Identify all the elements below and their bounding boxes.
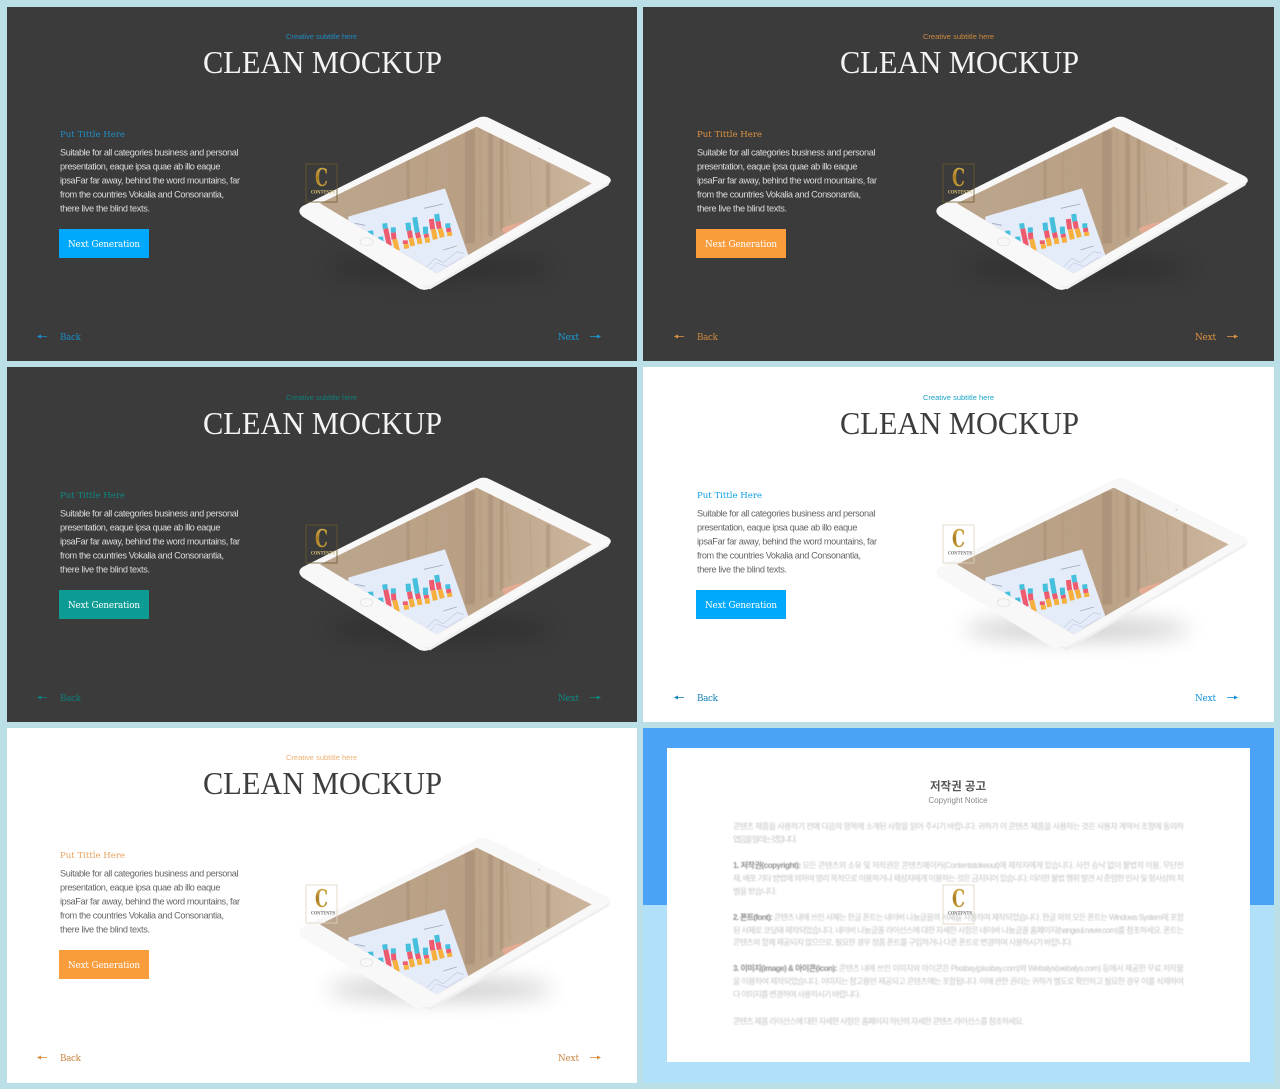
body text: Suitable for all categories business and personal — [697, 148, 876, 158]
body text: from the countries Vokalia and Consonantia, — [697, 190, 861, 200]
body text: ipsaFar far away, behind the word mountains, far — [60, 176, 240, 186]
notice body text: 다 이미지를 변경하여 사용하시기 바랍니다. — [733, 989, 861, 999]
icon: logo watermark: CONTENTS — [311, 910, 335, 916]
icon: logo watermark — [943, 884, 974, 924]
panel: copyright notice — [643, 728, 1274, 1083]
next link: Next — [558, 1054, 579, 1064]
back link: Back — [697, 333, 719, 343]
panel: dark slide, teal accent — [7, 367, 637, 722]
body text: presentation, eaque ipsa quae ab illo eaque — [60, 882, 220, 892]
body text: there live the blind texts. — [60, 564, 150, 574]
notice body text: 였음을 알리는 것입니다. — [733, 834, 797, 844]
button: Next Generation — [68, 601, 140, 611]
next link — [1195, 333, 1238, 343]
back link — [674, 333, 719, 343]
section heading: Put Tittle Here — [60, 130, 125, 140]
section heading: Put Tittle Here — [697, 491, 762, 501]
body text: there live the blind texts. — [60, 204, 150, 214]
body text: from the countries Vokalia and Consonantia, — [60, 190, 224, 200]
next link — [558, 333, 601, 343]
back link — [37, 1054, 82, 1064]
icon: logo watermark: CONTENTS — [948, 910, 972, 916]
subtitle: Creative subtitle here — [286, 753, 357, 762]
body text: Suitable for all categories business and personal — [697, 508, 876, 518]
body text: from the countries Vokalia and Consonantia, — [697, 550, 861, 560]
button: Next Generation — [705, 240, 777, 250]
back link: Back — [60, 694, 82, 704]
icon: logo watermark: CONTENTS — [311, 550, 335, 556]
body text: ipsaFar far away, behind the word mountains, far — [697, 176, 877, 186]
next link: Next — [1195, 694, 1216, 704]
notice body text: 3. 이미지(image) & 아이콘(icon): 콘텐츠 내에 쓰인 이미지와 아이콘은 Pixabay(pixabay.com)와 Webalys(webalys.com) 등에서 제공한 무료 저작물 — [733, 963, 1184, 973]
icon: logo watermark — [306, 524, 337, 563]
body text — [697, 508, 877, 574]
body text: ipsaFar far away, behind the word mountains, far — [697, 536, 877, 546]
tablet mockup — [299, 838, 611, 1011]
notice body text: 콘텐츠와 함께 제공되지 않으므로, 필요한 경우 정품 폰트를 구입하거나 다른 폰트로 변경하여 사용하시기 바랍니다. — [733, 937, 1073, 947]
title: CLEAN MOCKUP — [203, 44, 442, 80]
back link: Back — [697, 694, 719, 704]
back link — [37, 333, 82, 343]
icon: logo watermark: CONTENTS — [311, 190, 335, 196]
subtitle: Creative subtitle here — [286, 32, 357, 41]
notice body text: 된 서체로 코딩돼 제작되었습니다. 네이버 나눔글꼴 라이선스에 대한 자세한 사항은 네이버 나눔글꼴 홈페이지(hangeul.naver.com)를 참조하세요. 폰트는 — [733, 925, 1184, 935]
icon: logo watermark: C — [315, 524, 328, 553]
section heading: Put Tittle Here — [60, 851, 125, 861]
subtitle: Creative subtitle here — [923, 393, 994, 402]
icon: logo watermark: CONTENTS — [948, 190, 972, 196]
body text: presentation, eaque ipsa quae ab illo eaque — [697, 162, 857, 172]
notice body text — [733, 821, 1185, 1026]
next link: Next — [558, 333, 579, 343]
button — [59, 950, 149, 979]
tablet mockup — [936, 117, 1248, 290]
notice body text: 을 이용하여 제작되었습니다. 이미지는 참고용만 제공되고 콘텐츠에는 포함됩니다. 이에 관한 권리는 귀하가 별도로 확인하고 필요한 경우 이를 삭제하여 — [733, 976, 1184, 986]
body text: from the countries Vokalia and Consonantia, — [60, 910, 224, 920]
panel: white slide, orange accent — [7, 728, 637, 1083]
button: Next Generation — [68, 961, 140, 971]
panel: dark slide, orange accent — [643, 7, 1274, 361]
icon: logo watermark: C — [315, 163, 328, 192]
next link: Next — [1195, 333, 1216, 343]
next link: Next — [558, 694, 579, 704]
panel: white slide, blue accent — [643, 367, 1274, 722]
notice subheading: Copyright Notice — [928, 796, 988, 805]
body text — [60, 508, 240, 574]
notice body text: 재, 배포 기타 방법에 의하여 영리 목적으로 이용하거나 제삼자에게 이용하는 것은 금지되어 있습니다. 이러한 불법 행위 발견 시 준엄한 민사 및 형사상의 처 — [733, 873, 1184, 883]
icon: logo watermark — [943, 524, 974, 563]
button: Next Generation — [705, 601, 777, 611]
title: CLEAN MOCKUP — [203, 405, 442, 441]
body text: Suitable for all categories business and personal — [60, 148, 238, 158]
body text: ipsaFar far away, behind the word mountains, far — [60, 896, 240, 906]
body text: from the countries Vokalia and Consonantia, — [60, 550, 224, 560]
icon: logo watermark: C — [952, 524, 965, 553]
back link — [674, 694, 719, 704]
section heading: Put Tittle Here — [60, 491, 125, 501]
button — [696, 590, 786, 619]
notice heading: 저작권 공고 — [930, 779, 986, 793]
section heading: Put Tittle Here — [697, 130, 762, 140]
button — [59, 590, 149, 619]
notice card — [667, 748, 1250, 1062]
subtitle: Creative subtitle here — [286, 393, 357, 402]
body text — [697, 148, 877, 214]
back link: Back — [60, 333, 82, 343]
back link — [37, 694, 82, 704]
notice body text: 콘텐츠 제품 라이선스에 대한 자세한 사항은 홈페이지 하단의 자세한 콘텐츠 라이선스를 참조하세요. — [733, 1016, 1024, 1026]
body text: there live the blind texts. — [697, 564, 787, 574]
body text: presentation, eaque ipsa quae ab illo eaque — [60, 522, 220, 532]
notice body text: 벌을 받습니다. — [733, 886, 777, 896]
body text: Suitable for all categories business and personal — [60, 868, 238, 878]
body text — [60, 148, 240, 214]
title: CLEAN MOCKUP — [840, 44, 1079, 80]
notice body text: 1. 저작권(copyright): 모든 콘텐츠의 소유 및 저작권은 콘텐츠메이커(Contentstokeout)에 제작자에게 있습니다. 사전 승낙 없이 불법적 이용, 무단전 — [733, 860, 1184, 870]
notice body text: 2. 폰트(font): 콘텐츠 내에 쓰인 서체는 한글 폰트는 네이버 나눔글꼴의 서체를 사용하여 제작되었습니다. 한글 외의 모든 폰트는 Windows System에 포함 — [733, 912, 1185, 922]
icon: logo watermark — [306, 884, 337, 923]
subtitle: Creative subtitle here — [923, 32, 994, 41]
panel: dark slide, blue accent — [7, 7, 637, 361]
tablet mockup — [299, 478, 611, 651]
body text: there live the blind texts. — [697, 204, 787, 214]
back link: Back — [60, 1054, 82, 1064]
body text: there live the blind texts. — [60, 924, 150, 934]
icon: logo watermark — [306, 163, 337, 202]
next link — [1195, 694, 1238, 704]
body text: presentation, eaque ipsa quae ab illo eaque — [697, 522, 857, 532]
body text: Suitable for all categories business and personal — [60, 508, 238, 518]
button: Next Generation — [68, 240, 140, 250]
next link — [558, 1054, 601, 1064]
button — [59, 229, 149, 258]
icon: logo watermark: CONTENTS — [948, 550, 972, 556]
tablet mockup — [936, 478, 1248, 651]
body text: presentation, eaque ipsa quae ab illo eaque — [60, 162, 220, 172]
body text — [60, 868, 240, 934]
title: CLEAN MOCKUP — [840, 405, 1079, 441]
icon: logo watermark — [943, 163, 974, 202]
button — [696, 229, 786, 258]
notice body text: 콘텐츠 제품을 사용하기 전에 다음의 항목에 소개된 사항을 읽어 주시기 바랍니다. 귀하가 이 콘텐츠 제품을 사용하는 것은 사용자 계약서 조항에 동의하 — [733, 821, 1185, 831]
next link — [558, 694, 601, 704]
icon: logo watermark: C — [952, 884, 965, 913]
tablet mockup — [299, 117, 611, 290]
title: CLEAN MOCKUP — [203, 765, 442, 801]
icon: logo watermark: C — [315, 884, 328, 913]
icon: logo watermark: C — [952, 163, 965, 192]
body text: ipsaFar far away, behind the word mountains, far — [60, 536, 240, 546]
